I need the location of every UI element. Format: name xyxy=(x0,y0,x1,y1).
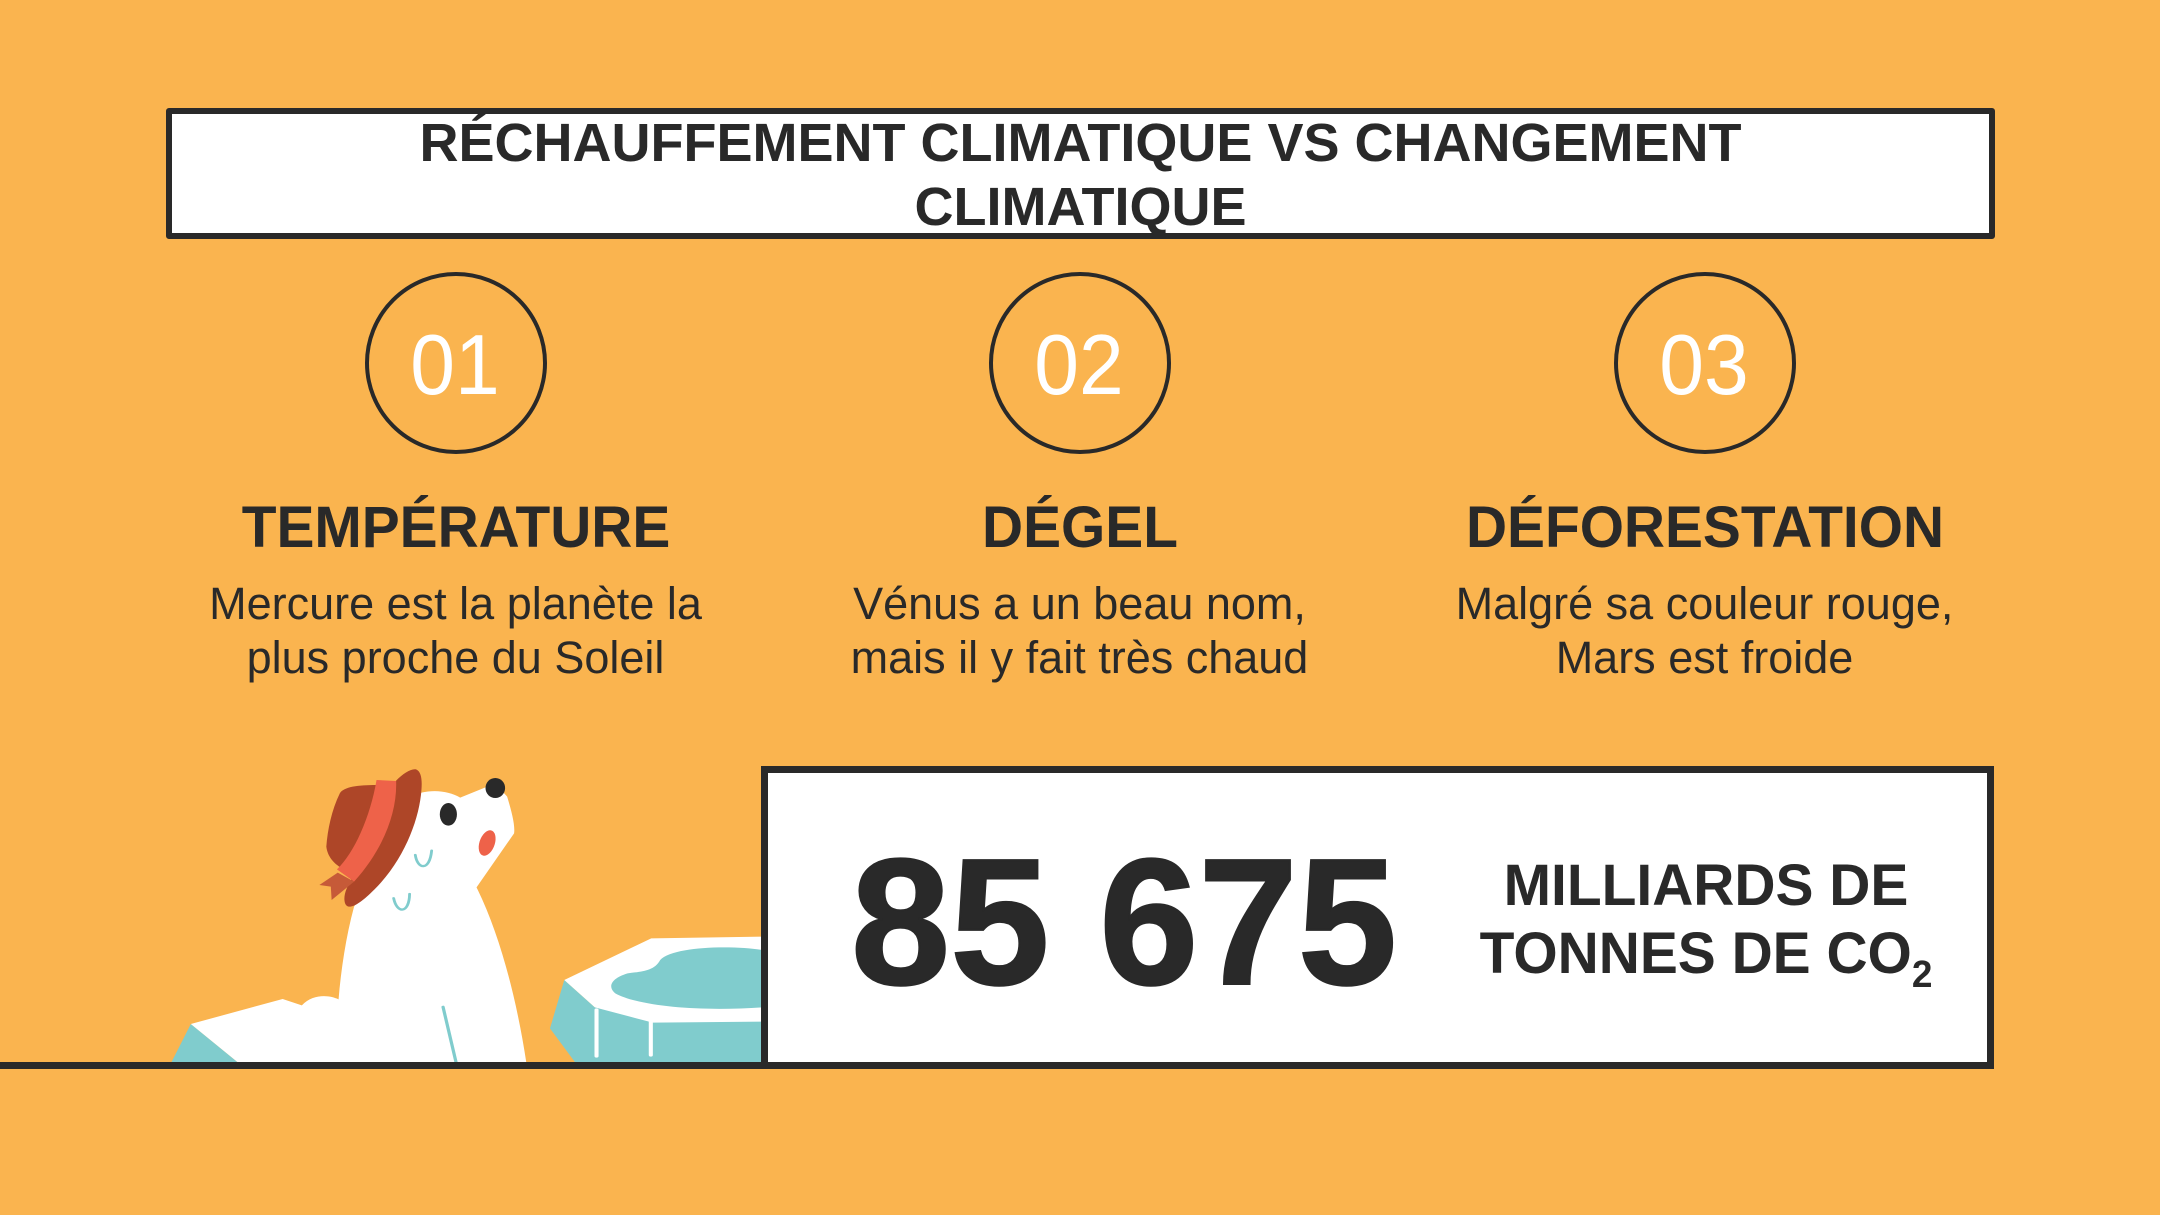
big number: 85 675 xyxy=(851,822,1397,1022)
bear nose xyxy=(486,778,505,798)
ice block: white top xyxy=(564,937,762,1023)
bear leg line xyxy=(443,1007,456,1063)
number circle 02 xyxy=(989,272,1171,454)
ribbon band xyxy=(337,780,396,882)
unit label: TONNES DE CO2 xyxy=(1480,921,1932,996)
unit label xyxy=(1480,853,1932,996)
heading dégel: DÉGEL xyxy=(982,495,1178,560)
column 03: déforestation xyxy=(1456,272,1953,683)
statistic panel xyxy=(761,766,1994,1069)
hat brim xyxy=(344,769,422,907)
description température: plus proche du Soleil xyxy=(247,632,664,683)
title text xyxy=(420,113,1741,237)
ice block: right drip xyxy=(646,1022,656,1055)
bear eye xyxy=(440,803,457,826)
ice floe: teal side under bear xyxy=(171,1024,238,1063)
ice block: left drip xyxy=(592,1010,602,1056)
ground line xyxy=(0,1062,770,1069)
ice block: melt pool xyxy=(611,947,762,1009)
title text: CLIMATIQUE xyxy=(915,177,1246,237)
unit label: MILLIARDS DE xyxy=(1504,853,1908,918)
hat xyxy=(319,769,422,907)
description dégel: Vénus a un beau nom, xyxy=(853,578,1306,629)
number circle 03 xyxy=(1614,272,1796,454)
title text: RÉCHAUFFEMENT CLIMATIQUE VS CHANGEMENT xyxy=(420,113,1741,173)
description dégel: mais il y fait très chaud xyxy=(851,632,1308,683)
description déforestation xyxy=(1456,578,1953,683)
description dégel xyxy=(851,578,1308,683)
column 01: température xyxy=(209,272,702,683)
description température: Mercure est la planète la xyxy=(209,578,702,629)
bear neck mark xyxy=(394,894,410,910)
bear cheek xyxy=(476,829,499,857)
description déforestation: Malgré sa couleur rouge, xyxy=(1456,578,1953,629)
column 02: dégel xyxy=(851,272,1308,683)
title banner xyxy=(166,108,1995,239)
number 01: 01 xyxy=(410,318,499,412)
ribbon tail xyxy=(319,873,354,900)
heading déforestation: DÉFORESTATION xyxy=(1466,495,1944,560)
polar bear body and ice top xyxy=(191,783,526,1063)
number circle 01 xyxy=(365,272,547,454)
bear smile mark xyxy=(415,851,432,866)
hat crown xyxy=(326,783,395,868)
number 03: 03 xyxy=(1659,318,1748,412)
description température xyxy=(209,578,702,683)
description déforestation: Mars est froide xyxy=(1556,632,1853,683)
number 02: 02 xyxy=(1034,318,1123,412)
heading température: TEMPÉRATURE xyxy=(242,495,670,560)
ice block: teal side xyxy=(550,980,762,1063)
